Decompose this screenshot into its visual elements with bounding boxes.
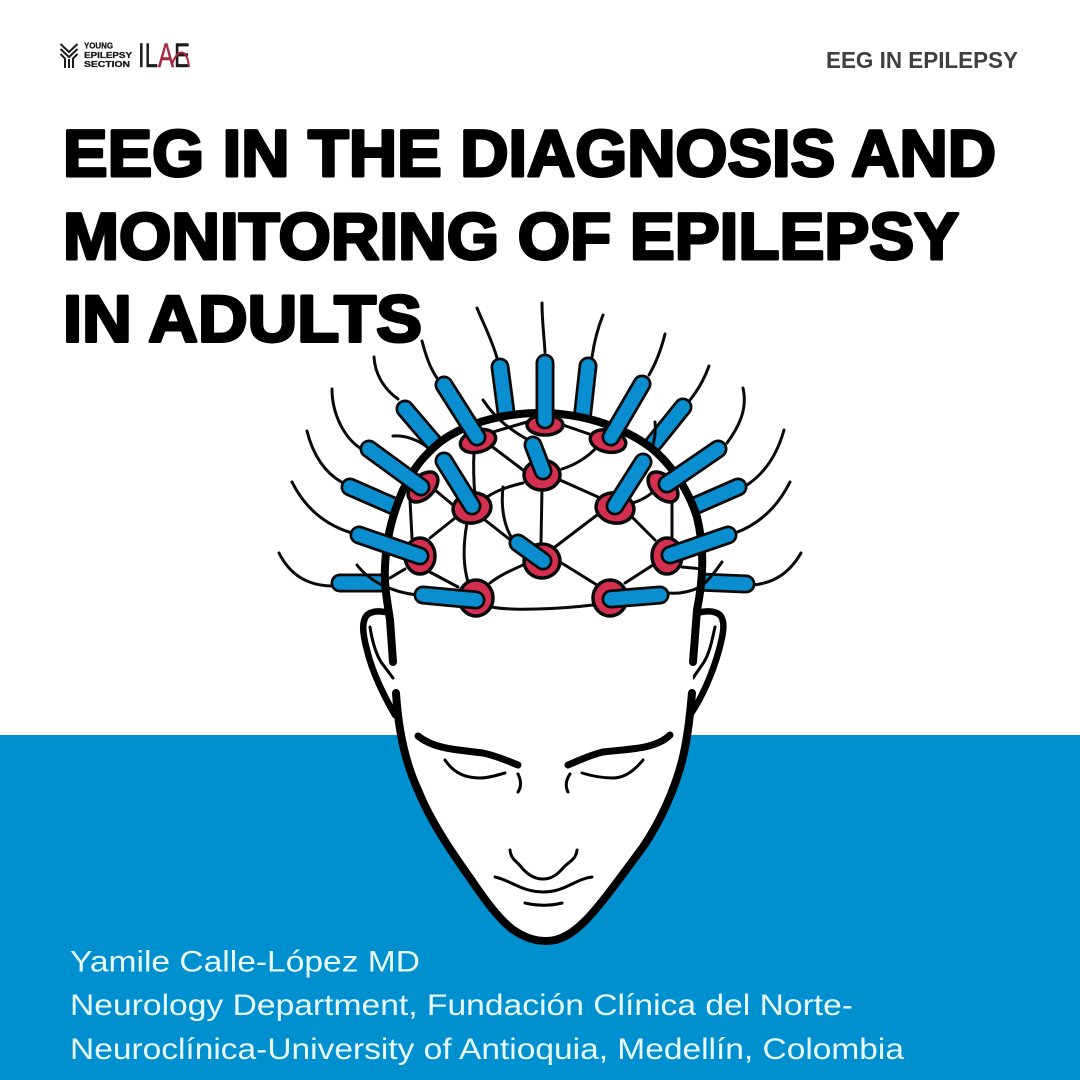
eyes and nose bridge: [445, 760, 643, 792]
logo wordmark: [84, 41, 132, 69]
head outline: [385, 413, 702, 941]
ears: [363, 611, 723, 715]
outer lead wires: [279, 303, 801, 586]
mouth: [495, 877, 592, 892]
blue electrodes over pads: [359, 363, 728, 600]
author block: [70, 946, 904, 1066]
illustration: head with EEG electrodes: [279, 303, 801, 941]
eyebrows: [418, 735, 670, 765]
outer electrodes behind head line: [340, 366, 746, 584]
head fill: [385, 413, 702, 941]
author block: Neuroclínica-University of Antioquia, Medellín, Colombia: [70, 1033, 904, 1066]
blue footer panel: [0, 735, 1080, 1080]
author block: Yamile Calle-López MD: [70, 946, 420, 978]
author block: Neurology Department, Fundación Clínica del Norte-: [70, 989, 853, 1022]
title: MONITORING OF EPILEPSY: [63, 199, 959, 273]
nose: [510, 850, 577, 879]
logo: Young Epilepsy Section ILAE: [60, 37, 190, 75]
chin: [525, 903, 562, 905]
title: IN ADULTS: [63, 282, 422, 356]
electrode mesh wires: [357, 400, 722, 609]
red electrode pads: [402, 415, 684, 616]
face features: [418, 735, 670, 905]
logo wordmark: EPILEPSY: [84, 50, 132, 60]
header label: EEG IN EPILEPSY: [826, 47, 1018, 73]
icon: Y logo mark: [60, 44, 78, 68]
title: EEG IN THE DIAGNOSIS AND: [63, 116, 996, 190]
logo wordmark: SECTION: [84, 59, 130, 69]
ILAE wordmark: ILAE: [138, 37, 190, 75]
title: [63, 116, 996, 356]
logo wordmark: YOUNG: [84, 41, 113, 51]
